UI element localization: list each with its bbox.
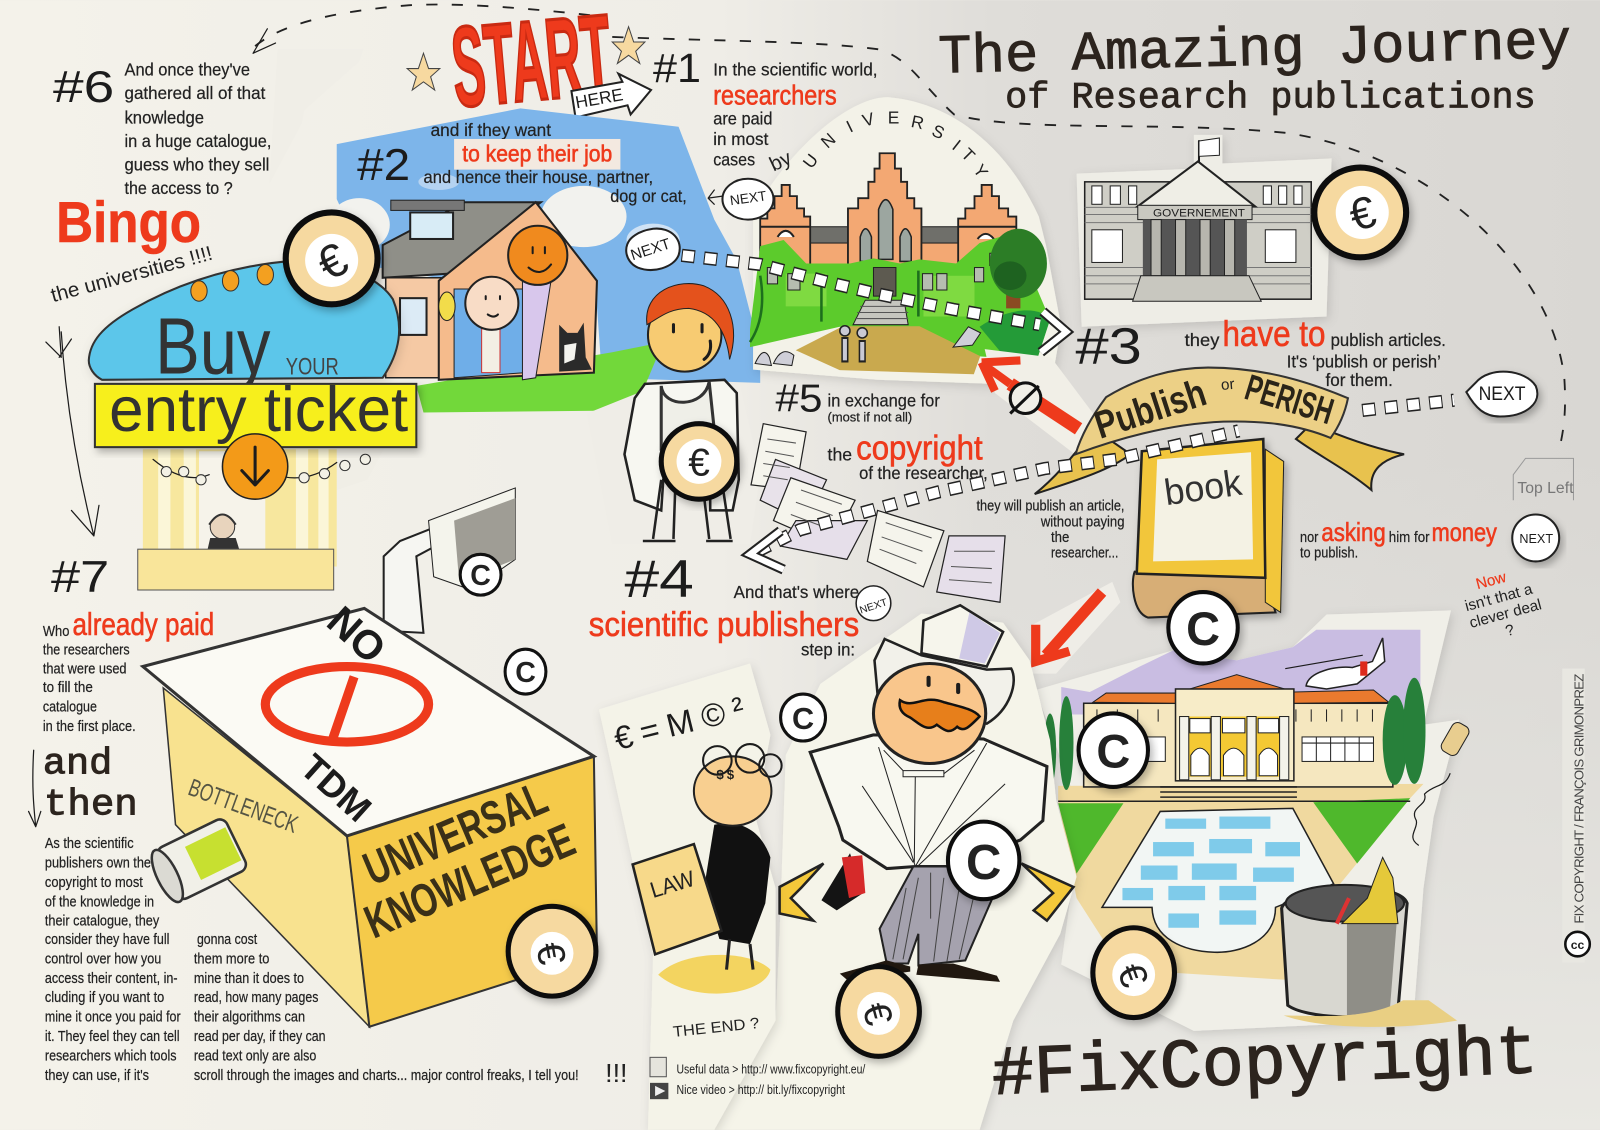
copy [43,606,214,735]
star right [612,27,645,63]
video icon [650,1083,668,1099]
publish without paying text: without paying [1040,515,1124,531]
ticket booth [89,212,416,590]
link text [677,1062,866,1097]
body left column: copyright to most [45,875,143,891]
next bubble tiny [856,586,891,621]
cc mark: cc [1571,938,1585,952]
lawn left [1058,803,1123,874]
body left column: As the scientific [45,836,134,852]
top left note: Top Left [1517,480,1574,497]
copyright symbol camera [460,554,501,595]
pocket square [821,853,865,910]
copy: have to [1222,314,1326,354]
copy: copyright [856,429,983,467]
step 6 copy: the access to ? [124,178,233,198]
pipe [384,488,515,633]
booth body [138,449,370,590]
head [873,663,986,763]
house scene [329,108,760,412]
next bubble publish: NEXT [1479,383,1526,405]
cover [1137,439,1265,578]
copy: In the scientific world, [713,60,878,80]
wings [1085,182,1311,299]
book icon [650,1057,666,1077]
links block [605,1057,866,1099]
universal label: UNIVERSAL [356,772,555,895]
body right column: read text only are also [194,1048,316,1064]
ribbon [1076,368,1348,454]
building [760,153,1016,268]
law book [633,844,721,954]
link text: Nice video > http:// bit.ly/fixcopyright [677,1082,845,1097]
body right column: read per day, if they can [194,1029,326,1045]
paper [599,663,776,1130]
link text: Useful data > http:// www.fixcopyright.eu/ [677,1062,866,1077]
garden path [797,327,980,374]
coin c suit [948,822,1019,899]
credits strip [1562,669,1590,962]
smoke and cork [1413,720,1471,845]
label: GOVERNEMENT [1153,208,1245,220]
left face [163,688,369,1027]
publish without paying text: researcher... [1051,545,1118,561]
jacket [810,735,1047,869]
body left column: cluding if you want to [45,990,164,1006]
exclamation: !!! [605,1060,628,1088]
chain next fill [1362,400,1454,410]
copy: scientific publishers [589,606,859,644]
copy: and hence their house, partner, [423,167,653,187]
arc label first letter: U [799,150,822,172]
steps [1133,276,1261,301]
body right column: their algorithms can [194,1010,305,1026]
arc label letters: T [957,144,979,166]
copyright coin book [1168,592,1238,663]
bottle [146,817,249,906]
paper [753,97,1061,386]
right hand [1021,863,1073,921]
hat crown shade [959,612,1000,663]
next bubble tiny: NEXT [858,597,889,617]
ribbon lettering or: or [1220,376,1235,394]
asking for money: nor [1300,530,1318,546]
coat [624,380,739,510]
hill [1061,630,1420,714]
here arrow [571,74,651,118]
step 3 text [1076,314,1446,390]
step 5 text [776,377,988,483]
and then [43,744,138,826]
law book: LAW [647,866,698,903]
asking for money: asking [1321,519,1386,547]
columns [1143,220,1247,276]
body left column: mine it once you paid for [45,1010,181,1026]
house [383,200,597,380]
and then: then [44,784,138,826]
chain university fill [682,255,1040,325]
number 2: #2 [357,139,410,190]
chain banner [757,431,1239,551]
publisher figure [714,605,1077,1130]
chain next [1362,400,1454,410]
copy: to fill the [43,680,93,696]
villa [1058,675,1410,801]
windows [1092,186,1302,262]
title: The Amazing Journey [938,11,1572,90]
clever deal note: isn't that a [1463,581,1535,615]
credit text: FIX COPYRIGHT / FRANÇOIS GRIMONPREZ [1572,674,1587,924]
copy: Who [43,624,69,640]
next bubble near researcher: NEXT [629,235,673,264]
publish without paying text: they will publish an article, [977,498,1124,514]
cat [559,323,592,372]
dashed journey path [253,5,1565,449]
coin euro [508,906,596,996]
sand [1058,784,1423,980]
arrow head [982,360,1020,391]
body right column: them more to [194,951,269,967]
title: book [1162,462,1245,513]
copyright symbol lawyer [781,694,826,741]
top left note [1513,458,1574,500]
fix copyright hashtag: #FixCopyright [991,1014,1539,1115]
copy: in exchange for [828,390,940,410]
asking for money: money [1432,519,1497,547]
pages [1133,572,1276,618]
arc label letters: N [817,129,840,152]
red arrow to university [982,349,1112,459]
bingo callout [49,191,215,307]
torn paper scrap top left [269,49,363,184]
ice bucket [1282,857,1407,1017]
clever deal note [1458,562,1548,649]
white angle arrow bottom [750,531,784,570]
copy: that were used [43,662,127,678]
lawyer legs [727,939,753,970]
banner publish or perish [1035,367,1404,494]
body right column: read, how many pages [194,990,318,1006]
formula: €=M©² [610,689,748,757]
copy: publish articles. [1331,330,1446,350]
knowledge label: KNOWLEDGE [357,813,582,948]
chain university [682,255,1040,325]
copy: It's ‘publish or perish’ [1287,352,1441,372]
body right column: gonna cost [197,932,257,948]
collar and bow [884,750,974,777]
flag [1199,138,1219,163]
clever deal note: ? [1504,622,1516,640]
body left column: researchers which tools [45,1048,177,1064]
arc label letters: S [929,120,948,143]
grass [416,342,663,412]
step 1 text [653,45,878,170]
white angle arrow top [1041,311,1066,352]
coin copyright villa: C [1096,726,1130,778]
side arrow [29,750,41,827]
copy: in most [713,129,769,149]
paper [1036,610,1459,1031]
copy: cases [713,150,755,170]
clouds [329,174,680,256]
coin euro [1314,168,1406,257]
body right column [194,932,579,1084]
sky [337,108,760,383]
cc mark [1565,932,1590,956]
coin euro [661,424,737,499]
paper [1077,135,1332,327]
arc label letters: E [888,108,899,128]
copy: dog or cat, [610,186,687,206]
publish without paying text: the [1051,530,1069,546]
coin c suit: C [966,836,1001,890]
arc label letters: Y [969,160,992,182]
copyright symbol camera: C [470,560,491,592]
shirt [661,382,716,449]
ivy and lawn [750,233,1050,360]
coin euro floor [838,967,919,1056]
step 6 text [53,60,271,198]
publish without paying text [977,498,1124,561]
and then: and [43,744,112,786]
paper [587,383,760,544]
step 7 text [29,551,579,1084]
step 6 copy: knowledge [124,108,204,128]
cypress trees [1044,678,1426,790]
number 4: #4 [624,550,694,609]
moustache [900,700,980,731]
bingo word: Bingo [56,191,201,255]
book [1133,439,1284,618]
copy: to keep their job [462,140,612,166]
wig and eyes [703,744,782,777]
copyright symbol box [505,649,546,694]
next bubble near university [708,179,773,220]
dollar eyes: $$ [716,767,737,782]
body right column: scroll through the images and charts... major control freaks, I tell you! [194,1068,579,1084]
the end: THE END ? [672,1015,760,1041]
ribbon lettering: Publish [1089,371,1211,448]
coin euro pool: € [1108,958,1156,993]
body left column: control over how you [45,951,161,967]
legs [643,480,733,541]
copy: are paid [713,109,772,129]
child [439,277,518,373]
step 6 copy: guess who they sell [124,155,269,175]
arc label letters: V [860,108,877,131]
bottleneck label: BOTTLENECK [185,774,302,839]
right face [347,756,597,1027]
body left column: access their content, in- [45,971,178,987]
bucket shadow [1284,1000,1457,1027]
number 3: #3 [1076,317,1142,374]
paper [714,613,1077,1130]
by: by [766,147,796,176]
paper [985,349,1112,459]
clever deal note: Now [1474,569,1509,593]
the universities: the universities !!!! [49,243,215,307]
copy: the [828,444,852,464]
here arrow: HERE [574,84,625,112]
no sign [1010,383,1041,413]
government building [1077,135,1406,327]
jacket lapels [862,743,1005,867]
body left column: their catalogue, they [45,914,160,930]
next bubble small [1512,514,1559,561]
step 6 copy: in a huge catalogue, [124,131,271,151]
pool [1102,808,1334,952]
universal knowledge box [143,488,597,1027]
white angle arrow top fill [1041,311,1066,352]
copy: And that's where [734,582,859,602]
shoes [840,960,1000,982]
researcher figure [587,284,760,544]
sign: entry ticket [109,375,409,445]
clever deal note: clever deal [1468,596,1543,632]
copy: step in: [801,639,855,659]
number 6: #6 [53,61,114,112]
orange arrow disc [222,434,288,499]
copy: for them. [1326,370,1393,390]
body left column: it. They feel they can tell [45,1029,180,1045]
copyright coin book: C [1186,603,1220,655]
no label: NO [318,597,395,672]
start here heading [407,0,651,132]
body left column: publishers own the [45,856,151,872]
coin euro: € [1344,185,1381,241]
copyright symbol box: C [515,657,536,689]
body right column: mine than it does to [194,971,304,987]
your text: YOUR [286,354,339,381]
trousers [880,867,993,966]
arc label letters [817,108,992,182]
star left [407,53,440,90]
robe [704,823,770,944]
copy: in the first place. [43,719,136,735]
copyright symbol lawyer: C [792,702,814,736]
face [648,298,721,372]
chain banner fill [757,431,1239,551]
step 6 copy: And once they've [124,60,250,80]
coin euro pool [1093,928,1174,1018]
copy: already paid [72,606,214,642]
lamps [191,264,273,301]
helicopter [1286,638,1385,689]
number 1: #1 [653,45,701,91]
ribbon lettering perish: PERISH [1241,367,1338,432]
paper scrap right of booth [337,449,384,490]
arrow [1010,384,1079,429]
next bubble publish [1466,372,1537,417]
body left column [45,836,181,1084]
pediment [1138,161,1255,206]
step 6 copy: gathered all of that [124,83,265,103]
body left column: consider they have full [45,932,169,948]
face features [673,325,711,359]
coin euro: € [527,939,573,968]
left arrow [46,327,99,536]
people [755,326,981,366]
label [1138,205,1252,220]
copy: researchers [713,79,837,110]
head [694,756,771,826]
tree [990,229,1047,308]
coin euro floor: € [853,998,901,1030]
asking for money: to publish. [1300,545,1358,561]
copy: (most if not all) [828,410,912,425]
lawn right [1313,798,1410,863]
tdm label: TDM [293,746,379,830]
back cover [1265,449,1284,612]
asking for money [1300,519,1497,561]
body left column: of the knowledge in [45,894,154,910]
copy: the researchers [43,642,130,658]
hat brim [874,639,1014,724]
next bubble near researcher [626,229,680,270]
coin over blob [286,212,378,304]
mother [508,226,567,380]
arc label letters: I [843,116,856,136]
copy: catalogue [43,699,97,715]
next bubble near university: NEXT [729,188,768,208]
step 4 text [589,550,859,659]
blue blob [89,261,399,380]
label area [1153,452,1253,561]
yellow ground [658,955,770,994]
trouser stripes [893,873,974,961]
copy: of the researcher, [859,463,988,483]
coin copyright villa [1079,713,1148,787]
coin over blob: € [309,233,356,291]
copy [1185,314,1446,390]
arc label letters: R [909,111,926,133]
hair [647,284,734,359]
eyes [929,678,958,692]
number 7: #7 [51,551,109,602]
copy [423,120,687,206]
copy [589,582,859,659]
strip [1562,669,1585,962]
white angle arrow bottom fill [750,531,784,570]
university scene [750,97,1061,386]
number 5: #5 [776,377,822,420]
asking for money: him for [1389,530,1430,546]
house copy [357,120,687,206]
next bubble small: NEXT [1519,531,1553,546]
step 6 copy [124,60,271,198]
scattered articles [751,424,1005,602]
copy: they [1185,330,1220,350]
wing lines [1085,207,1311,284]
title: of Research publications [1005,77,1536,119]
copy: and if they want [431,120,551,140]
no tdm mark [265,667,429,742]
lawyer panel [599,663,782,1130]
red arrow to publisher [1031,582,1120,674]
top face [143,608,594,836]
arc label letters: I [949,136,965,154]
body left column: they can use, if it's [45,1068,149,1084]
mansion scene [1036,610,1471,1031]
copy [713,60,878,170]
copy [828,390,988,483]
left hand [780,863,823,921]
tails [1035,424,1404,494]
buy text: Buy [155,302,271,391]
coin euro: € [688,442,710,485]
hat crown [921,605,1003,667]
